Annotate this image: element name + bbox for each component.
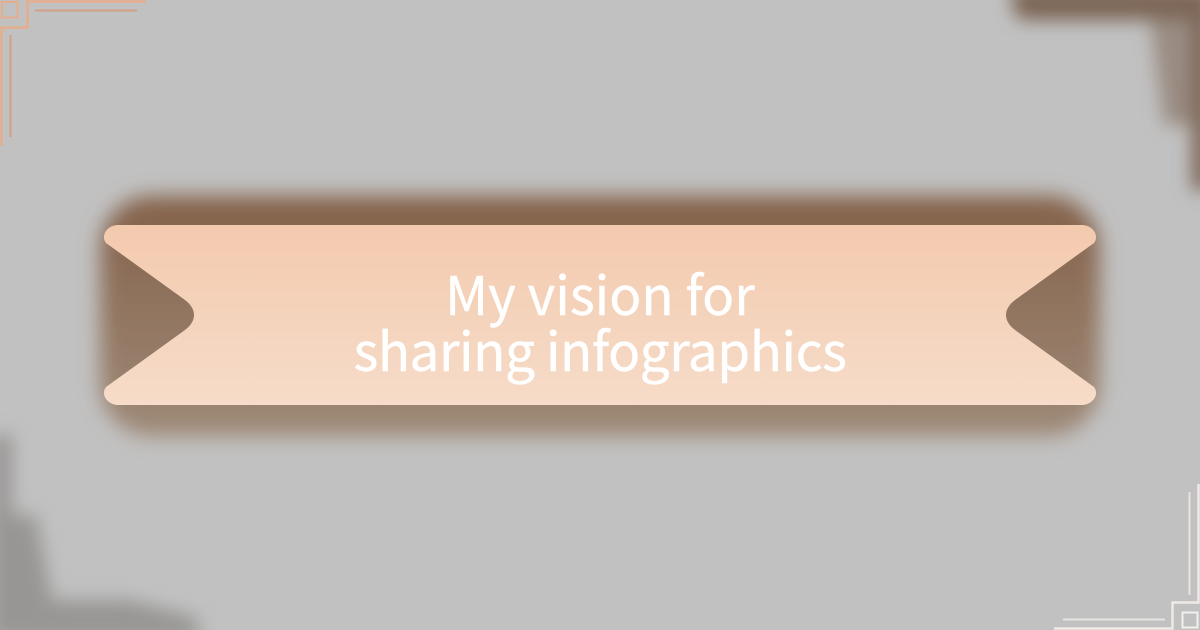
ribbon shadow (100, 196, 1100, 436)
blurred corner shadow: bottom left (0, 435, 198, 630)
title: My vision for (445, 255, 755, 331)
ribbon banner (104, 225, 1096, 405)
blurred corner shadow: top right (1012, 0, 1200, 190)
title (353, 255, 847, 387)
title: sharing infographics (353, 311, 847, 387)
corner frame: top left (2, 2, 146, 146)
corner frame: bottom right (1054, 484, 1198, 628)
